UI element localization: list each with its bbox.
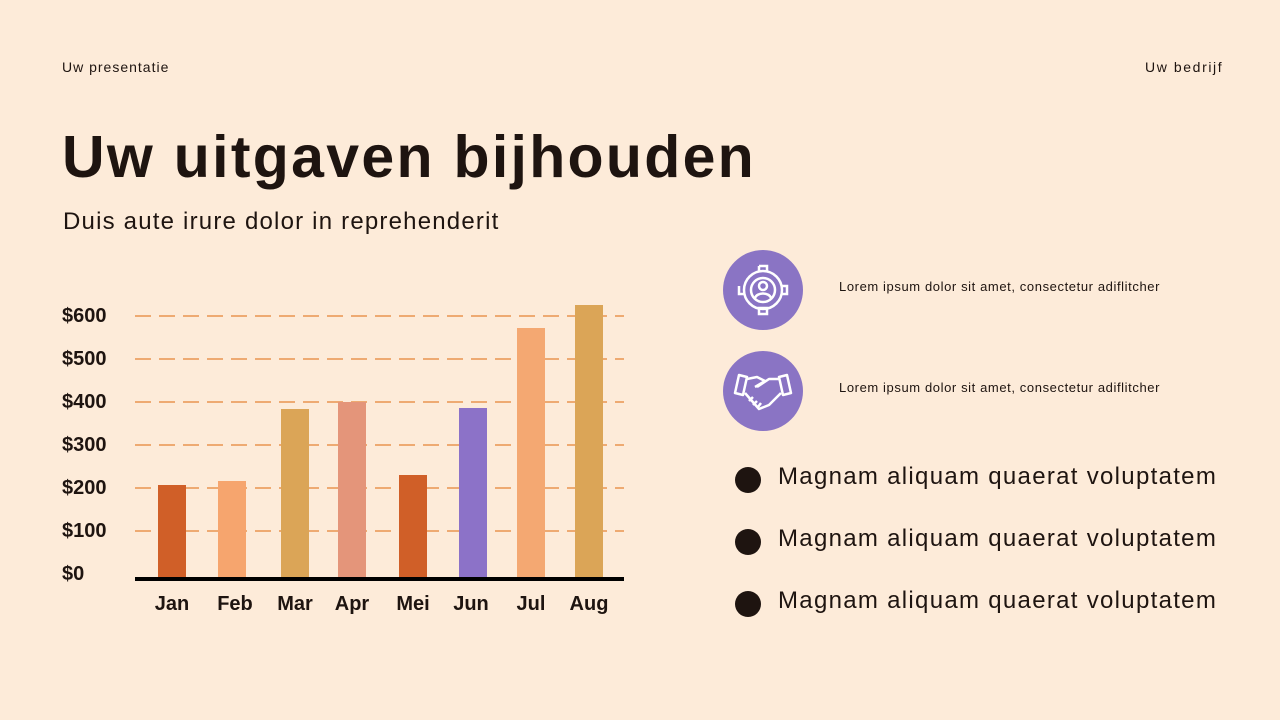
header right: Uw bedrijf — [1145, 59, 1223, 75]
bar chart: Jan — [155, 593, 189, 615]
bar chart: $400 — [62, 391, 106, 413]
header left: Uw presentatie — [62, 59, 169, 75]
bar chart: $100 — [62, 520, 106, 542]
subtitle: Duis aute irure dolor in reprehenderit — [63, 208, 499, 235]
bar chart — [62, 305, 624, 615]
title: Uw uitgaven bijhouden — [62, 124, 756, 190]
bar chart: $300 — [62, 434, 106, 456]
bar chart: Jul — [517, 593, 545, 615]
bullet list — [735, 463, 1217, 617]
bar chart: $500 — [62, 348, 106, 370]
bar chart: Mar — [277, 593, 313, 615]
bullet 1: Magnam aliquam quaerat voluptatem — [778, 463, 1217, 490]
bar chart: Apr — [335, 593, 369, 615]
icon: handshake — [723, 351, 803, 431]
bar chart: Jun — [453, 593, 489, 615]
bar chart: $600 — [62, 305, 106, 327]
bar chart: Feb — [217, 593, 253, 615]
bar chart: $200 — [62, 477, 106, 499]
bar chart: Aug — [570, 593, 608, 615]
text 2: Lorem ipsum dolor sit amet, consectetur adiflitcher — [839, 380, 1160, 395]
icon: gear person — [723, 250, 803, 330]
text 1: Lorem ipsum dolor sit amet, consectetur adiflitcher — [839, 279, 1160, 294]
bullet 2: Magnam aliquam quaerat voluptatem — [778, 525, 1217, 552]
bar chart: Mei — [396, 593, 430, 615]
bullet 3: Magnam aliquam quaerat voluptatem — [778, 587, 1217, 614]
bar chart: $0 — [62, 563, 84, 585]
